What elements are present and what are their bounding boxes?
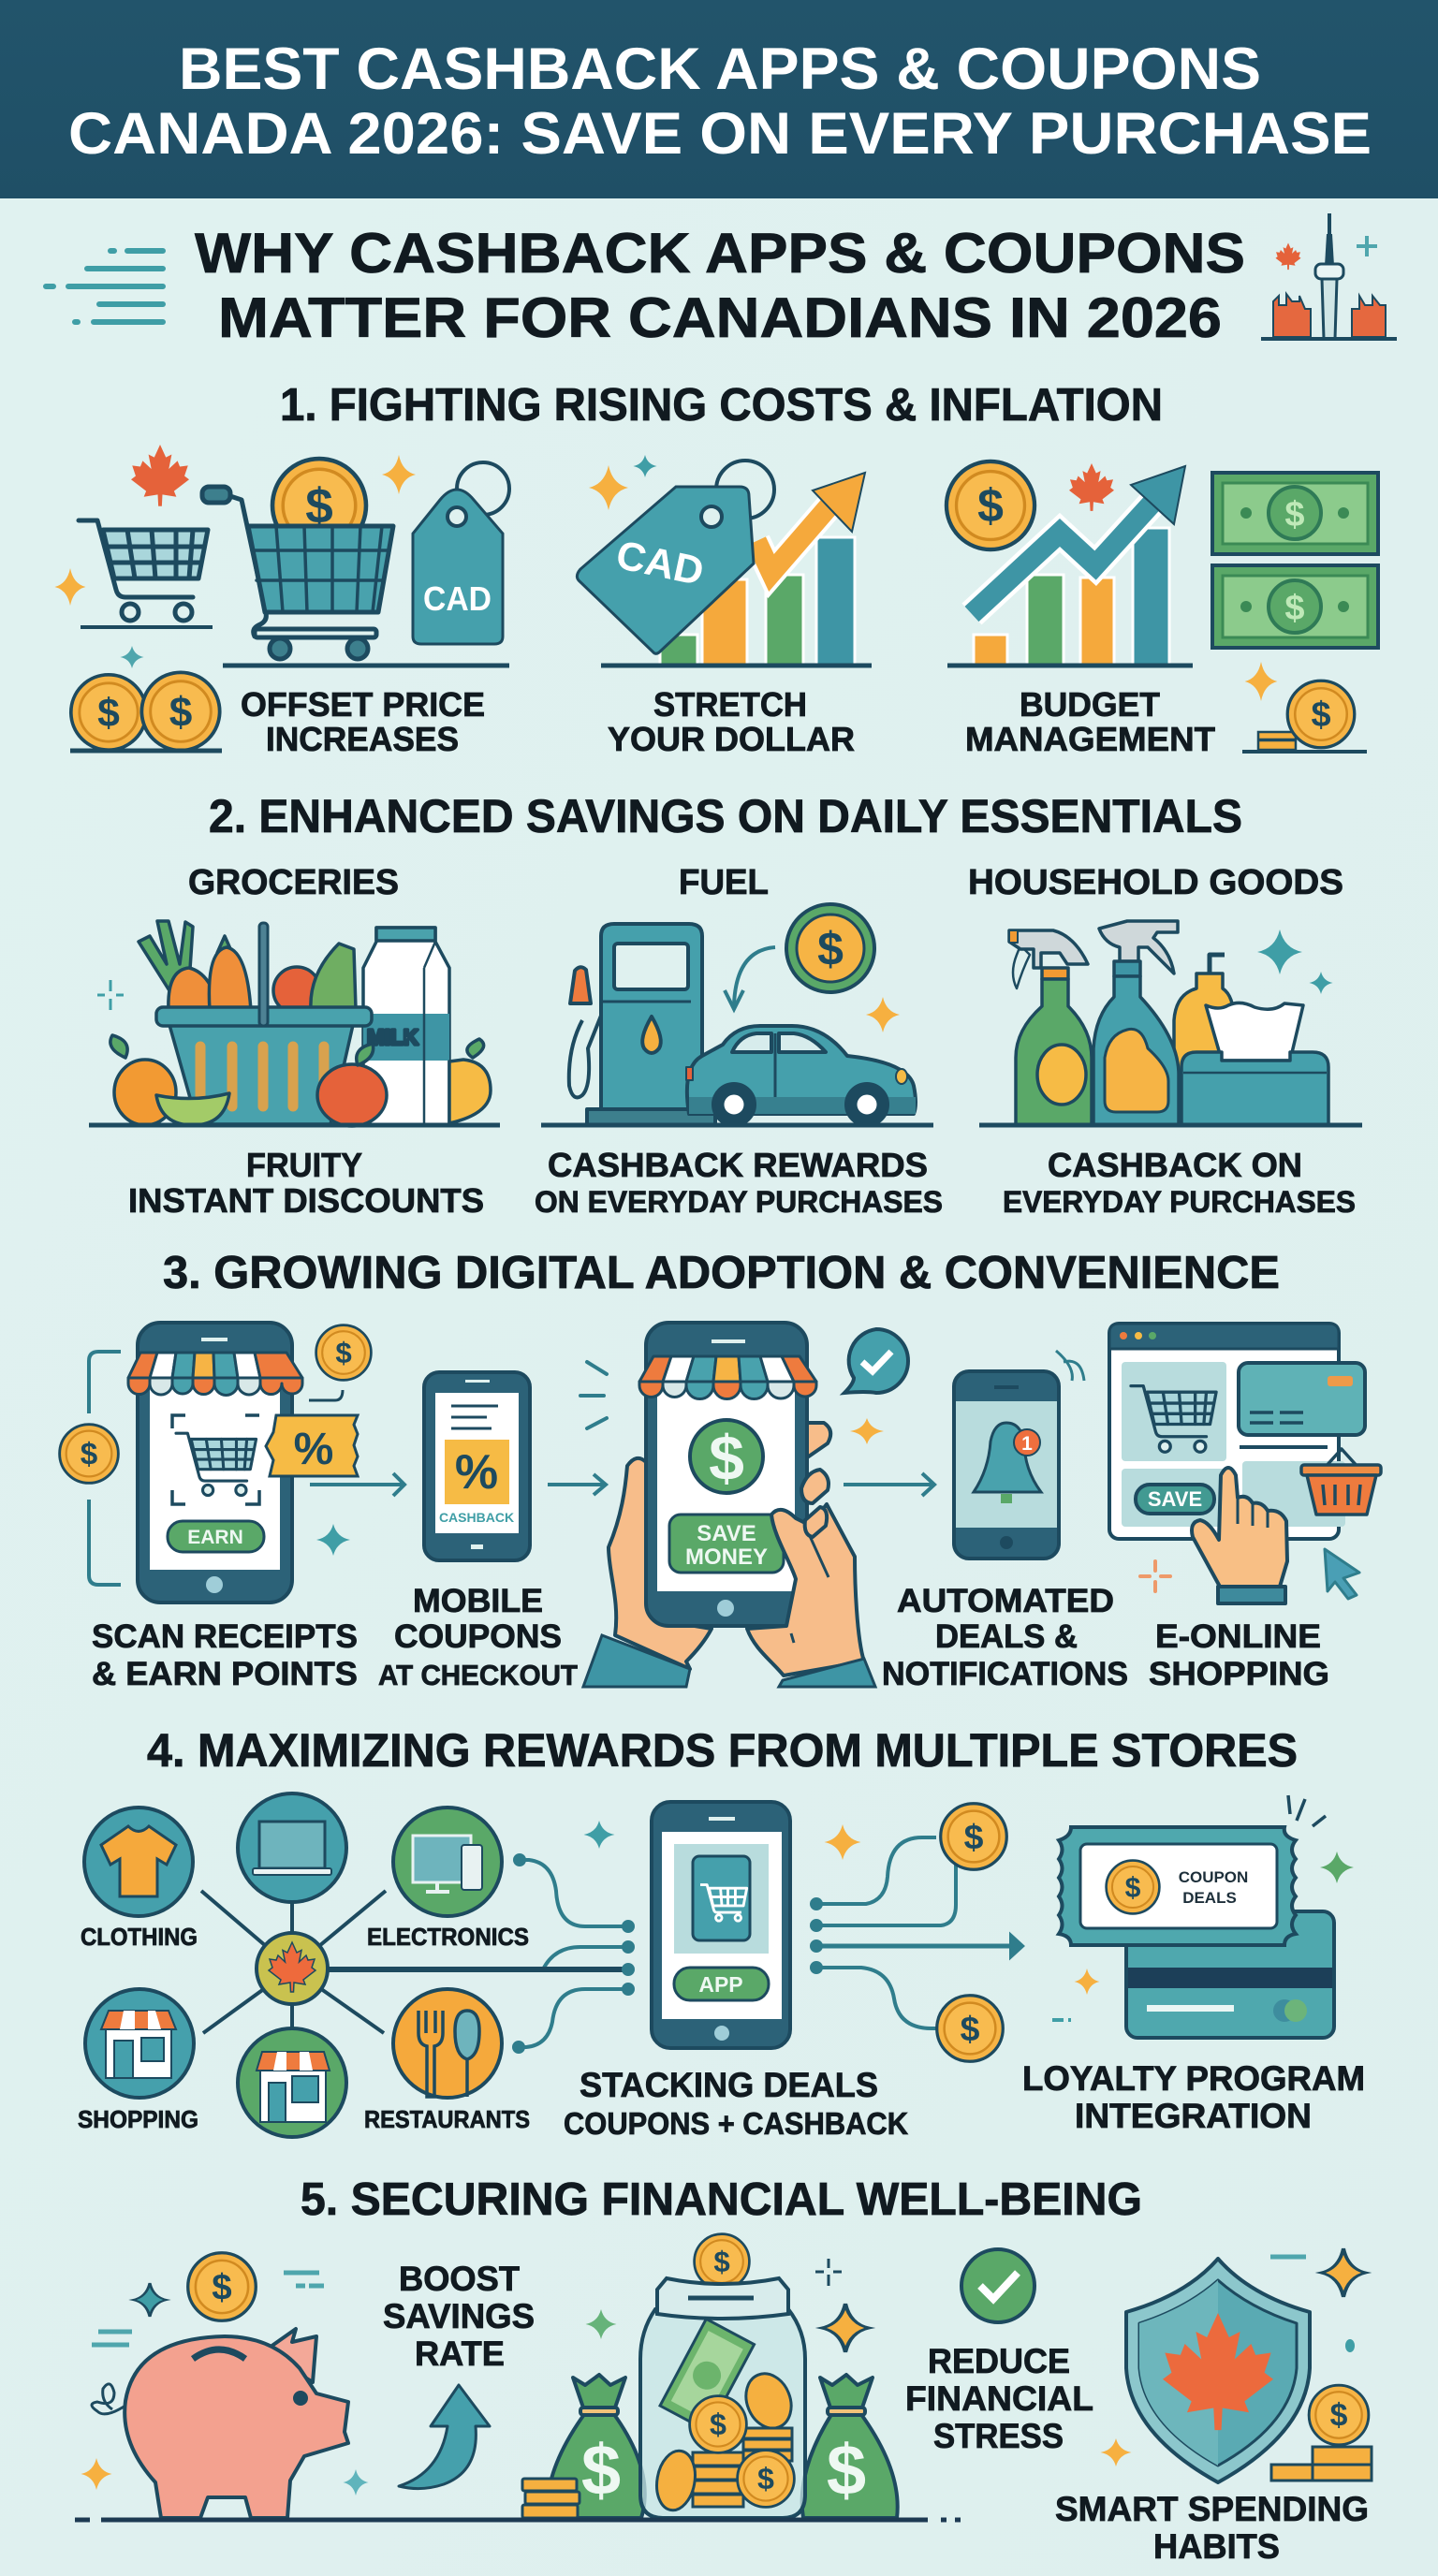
icon: plus sparkle xyxy=(1140,1561,1170,1591)
icon: shield with maple leaf xyxy=(1126,2259,1310,2482)
icon: small shopping cart xyxy=(79,520,208,621)
label: ELECTRONICS xyxy=(367,1923,529,1951)
icon: glass jar: $ xyxy=(757,2462,774,2496)
panel: offset price increases xyxy=(54,445,509,758)
icon: coin xyxy=(316,1325,371,1380)
icon: banknotes: $ xyxy=(1284,495,1305,534)
icon: banknote in jar xyxy=(660,2319,755,2431)
panel: household goods xyxy=(968,863,1362,1219)
icon: glass jar: $ xyxy=(713,2246,730,2278)
icon: cleaning products xyxy=(1009,921,1328,1125)
label xyxy=(1055,2490,1369,2566)
label xyxy=(92,1618,358,1692)
label xyxy=(535,1146,943,1219)
icon: maple hub xyxy=(257,1933,328,2004)
icon: credit card xyxy=(1239,1363,1365,1435)
icon: grocery basket with produce: MILK xyxy=(367,1025,418,1049)
icon: phone xyxy=(639,1323,816,1626)
label: CASHBACK REWARDS xyxy=(548,1146,928,1184)
panel: save money phone in hands xyxy=(580,1323,908,1687)
button: app xyxy=(674,1968,769,2000)
panel: automated deals xyxy=(882,1351,1128,1692)
label: FINANCIAL xyxy=(905,2379,1093,2418)
icon: sparkles xyxy=(586,2259,869,2352)
icon: large shopping cart xyxy=(202,487,393,659)
label: STRESS xyxy=(933,2417,1064,2455)
heading: section 3: 3. GROWING DIGITAL ADOPTION & CONVENIENCE xyxy=(163,1248,1280,1298)
label: EVERYDAY PURCHASES xyxy=(1003,1185,1356,1219)
label: COUPONS xyxy=(394,1618,562,1655)
button: save money xyxy=(669,1515,784,1573)
label xyxy=(128,1146,484,1220)
icon: percent coupon xyxy=(266,1415,358,1476)
icon: money bags: $ xyxy=(827,2431,866,2510)
heading: FUEL xyxy=(679,863,769,902)
icon: scan frame and cart xyxy=(172,1415,259,1504)
icon: sparkles and dashes xyxy=(81,2273,369,2496)
icon: coins in jar xyxy=(653,2367,800,2513)
icon: coin: $ xyxy=(977,479,1004,532)
label: RESTAURANTS xyxy=(364,2105,530,2133)
icon: phone with bell: 1 xyxy=(1021,1433,1033,1455)
label: & EARN POINTS xyxy=(92,1656,358,1692)
icon: pair of coins: $ xyxy=(169,689,192,735)
icon: coin: $ xyxy=(817,923,844,975)
icon: finger behind phone xyxy=(803,1423,830,1460)
heading: HOUSEHOLD GOODS xyxy=(968,863,1343,902)
icon: sparkle xyxy=(54,568,86,606)
icon: coin in cart: $ xyxy=(305,478,333,534)
label xyxy=(78,1923,530,2133)
panel: store network xyxy=(78,1793,530,2137)
icon: coupon deals ticket: DEALS xyxy=(1182,1889,1237,1907)
icon: glass jar: $ xyxy=(710,2408,726,2441)
ground line xyxy=(75,2518,961,2522)
icon: sparkle xyxy=(584,1821,614,1849)
label: SCAN RECEIPTS xyxy=(92,1618,358,1655)
label: AUTOMATED xyxy=(897,1583,1114,1619)
label: AT CHECKOUT xyxy=(378,1659,578,1691)
icon: maple leaf xyxy=(1069,463,1114,511)
icon: plus xyxy=(633,455,657,477)
icon: phone with store xyxy=(128,1323,302,1603)
arrow: teal rising xyxy=(972,466,1185,614)
label: MANAGEMENT xyxy=(965,720,1215,758)
icon: restaurants xyxy=(393,1989,502,2098)
icon: sparkle xyxy=(316,1524,350,1556)
icon: coin xyxy=(188,2253,256,2320)
label: YOUR DOLLAR xyxy=(608,720,855,758)
icon: coin and gold stack xyxy=(1271,2385,1372,2481)
button: app: APP xyxy=(698,1972,743,1997)
subtitle: MATTER FOR CANADIANS IN 2026 xyxy=(218,286,1222,349)
panel: boost savings rate xyxy=(81,2253,535,2518)
icon: coin and stack xyxy=(1242,681,1367,752)
label: INCREASES xyxy=(266,720,459,758)
label: ON EVERYDAY PURCHASES xyxy=(535,1185,943,1219)
icon: sparkle xyxy=(866,997,900,1032)
title: BEST CASHBACK APPS & COUPONS xyxy=(179,37,1261,102)
icon: sparkle xyxy=(589,465,628,510)
panel: mobile coupons xyxy=(378,1372,578,1691)
label: stacking deals: COUPONS + CASHBACK xyxy=(564,2106,908,2141)
icon: coin: $ xyxy=(212,2267,232,2307)
label xyxy=(608,685,855,758)
icon: store awning xyxy=(639,1356,816,1398)
icon: phone with coupon: CASHBACK xyxy=(439,1510,514,1525)
panel: smart spending habits xyxy=(1055,2248,1372,2566)
icon: coupon deals ticket: COUPON xyxy=(1179,1868,1248,1886)
label: CASHBACK ON xyxy=(1048,1146,1302,1184)
arrow: orange rising xyxy=(756,473,865,573)
icon: app phone xyxy=(652,1802,790,2048)
icon: store awning xyxy=(128,1353,302,1395)
icon: sparkle xyxy=(382,455,416,494)
icon: coin xyxy=(786,904,874,992)
panel: jar of savings xyxy=(522,2234,898,2518)
icon: money bags: $ xyxy=(581,2431,621,2510)
icon: store xyxy=(238,2028,346,2137)
icon: CAD tag: CAD xyxy=(612,533,708,594)
label xyxy=(1022,2059,1365,2135)
label: FRUITY xyxy=(246,1146,362,1184)
label xyxy=(1149,1618,1329,1692)
icon: sparkles xyxy=(1052,1852,1354,2020)
heading: section 5: 5. SECURING FINANCIAL WELL-BEING xyxy=(301,2174,1142,2225)
icon: reward coins: $ xyxy=(961,2009,980,2048)
label: NOTIFICATIONS xyxy=(882,1656,1128,1692)
heading: GROCERIES xyxy=(188,863,399,902)
button: earn xyxy=(168,1521,264,1552)
icon: phone with bell xyxy=(954,1351,1084,1559)
button: save xyxy=(1136,1485,1214,1514)
panel: e-online shopping xyxy=(1109,1324,1381,1692)
icon: coin: $ xyxy=(335,1337,352,1369)
icon: sparkle xyxy=(97,980,124,1010)
title xyxy=(68,37,1372,167)
panel: stretch your dollar xyxy=(577,455,872,758)
icon: reward coins xyxy=(937,1804,1006,2061)
chart: bars xyxy=(974,528,1169,665)
icon: phone with coupon xyxy=(424,1372,530,1560)
icon: piggy bank xyxy=(92,2329,348,2518)
chart: rising bars xyxy=(660,537,855,665)
icon: coin in cart xyxy=(272,459,366,552)
label: BOOST xyxy=(399,2260,520,2298)
icon: left hand xyxy=(583,1458,712,1687)
icon: banknotes: $ xyxy=(1284,589,1305,628)
panel: fuel xyxy=(535,863,943,1219)
panel: budget management xyxy=(946,461,1378,758)
icon: reward coins: $ xyxy=(964,1817,984,1856)
icon: CAD price tag xyxy=(413,462,509,644)
icon: sparkle xyxy=(1245,662,1277,701)
icon: sparkle xyxy=(824,1824,861,1860)
icon: maple leaf xyxy=(131,445,189,506)
heading: section 2: 2. ENHANCED SAVINGS ON DAILY ESSENTIALS xyxy=(209,790,1242,842)
button: earn: EARN xyxy=(187,1527,243,1548)
icon: glass jar xyxy=(640,2234,805,2518)
label: INTEGRATION xyxy=(1075,2097,1312,2135)
label: HABITS xyxy=(1153,2527,1280,2566)
arrow: upward curve xyxy=(399,2385,490,2489)
label: SAVINGS xyxy=(383,2297,535,2335)
icon: CAD tag xyxy=(577,461,774,653)
icon: CAD price tag: CAD xyxy=(423,579,492,618)
icon: right hand xyxy=(747,1504,875,1687)
connectors: app to rewards xyxy=(812,1837,1022,2028)
label xyxy=(383,2260,535,2373)
icon: pair of coins: $ xyxy=(97,691,120,736)
icon: shopping store xyxy=(85,1989,194,2098)
connector lines xyxy=(201,1891,386,2033)
icon: sparkle xyxy=(1257,929,1333,994)
icon: cursor arrow xyxy=(1325,1549,1359,1599)
label: LOYALTY PROGRAM xyxy=(1022,2059,1365,2098)
icon: speed lines xyxy=(46,251,163,322)
label xyxy=(1003,1146,1356,1219)
icon: chat check bubble xyxy=(844,1329,908,1393)
label xyxy=(905,2342,1093,2455)
label xyxy=(882,1583,1128,1692)
label: STRETCH xyxy=(653,685,807,724)
icon: plus xyxy=(120,646,144,668)
icon: clothing xyxy=(84,1808,193,1916)
label: E-ONLINE xyxy=(1155,1618,1321,1655)
heading: section 1: 1. FIGHTING RISING COSTS & INFLATION xyxy=(280,380,1163,431)
label: RATE xyxy=(415,2334,505,2373)
panel: loyalty program integration xyxy=(1022,1795,1365,2135)
heading: section 4: 4. MAXIMIZING REWARDS FROM MULTIPLE STORES xyxy=(147,1724,1298,1777)
icon: coin and stack: $ xyxy=(1311,695,1331,735)
icon: Toronto skyline xyxy=(1261,213,1397,339)
icon: laptop xyxy=(238,1793,346,1902)
title: CANADA 2026: SAVE ON EVERY PURCHASE xyxy=(68,101,1372,167)
label: BUDGET xyxy=(1020,685,1160,724)
label: SHOPPING xyxy=(78,2105,198,2133)
label: SHOPPING xyxy=(1149,1656,1329,1692)
icon: rays xyxy=(1288,1795,1326,1826)
icon: coin stack left xyxy=(522,2479,580,2518)
icon: pointing hand xyxy=(1192,1468,1287,1603)
button: save money: SAVE xyxy=(697,1521,756,1546)
icon: orange basket xyxy=(1301,1449,1381,1515)
label xyxy=(965,685,1215,758)
icon: coin: $ xyxy=(81,1438,98,1472)
icon: coin and gold stack: $ xyxy=(1330,2398,1348,2434)
label: SMART SPENDING xyxy=(1055,2490,1369,2528)
icon: loyalty card xyxy=(1126,1911,1334,2038)
icon: banknotes xyxy=(1212,473,1378,648)
label: CLOTHING xyxy=(81,1923,198,1951)
icon: browser window xyxy=(1109,1324,1365,1539)
icon: pair of coins xyxy=(71,672,220,751)
label: stacking deals xyxy=(564,2066,908,2141)
icon: car xyxy=(686,1026,916,1125)
label xyxy=(378,1583,578,1691)
subtitle: WHY CASHBACK APPS & COUPONS xyxy=(195,222,1245,285)
header banner xyxy=(0,0,1438,198)
icon: fingers over phone xyxy=(801,1470,829,1537)
arrow: curved xyxy=(725,947,775,1009)
icon: bracket xyxy=(89,1352,121,1585)
button: save money: MONEY xyxy=(685,1544,768,1570)
panel: groceries xyxy=(89,863,500,1220)
icon: money bags xyxy=(547,2375,898,2518)
arrow: step 2 xyxy=(548,1474,606,1495)
icon: coupon deals ticket xyxy=(1059,1827,1296,1945)
label: OFFSET PRICE xyxy=(241,685,485,724)
icon: fuel pump xyxy=(569,924,715,1125)
button: save: SAVE xyxy=(1148,1487,1202,1511)
icon: coin xyxy=(60,1425,118,1483)
icon: grocery basket with produce xyxy=(110,921,491,1126)
icon: coupon deals ticket: $ xyxy=(1125,1872,1141,1903)
panel: scan receipts xyxy=(60,1323,371,1692)
icon: sparkles and dashes xyxy=(1101,2248,1366,2466)
connectors: stores to app xyxy=(328,1855,633,2052)
label: MOBILE xyxy=(413,1583,543,1619)
arrow: step 1 xyxy=(310,1473,404,1496)
label: stacking deals: STACKING DEALS xyxy=(580,2066,878,2104)
icon: green dollar coin xyxy=(690,1420,763,1494)
subtitle xyxy=(195,222,1245,349)
icon: sparkle xyxy=(850,1418,884,1444)
icon: coin xyxy=(946,461,1034,549)
label xyxy=(241,685,485,758)
icon: green check xyxy=(961,2249,1034,2322)
icon: green dollar coin: $ xyxy=(709,1423,744,1494)
label: DEALS & xyxy=(935,1618,1078,1655)
icon: electronics xyxy=(393,1808,502,1916)
label: REDUCE xyxy=(928,2342,1070,2380)
label: INSTANT DISCOUNTS xyxy=(128,1181,484,1220)
icon: radiating lines xyxy=(580,1362,607,1428)
icon: percent coupon: % xyxy=(294,1425,333,1474)
panel: reduce financial stress xyxy=(905,2249,1093,2455)
icon: phone with coupon: % xyxy=(455,1445,498,1500)
arrow: step 3 xyxy=(844,1473,934,1496)
